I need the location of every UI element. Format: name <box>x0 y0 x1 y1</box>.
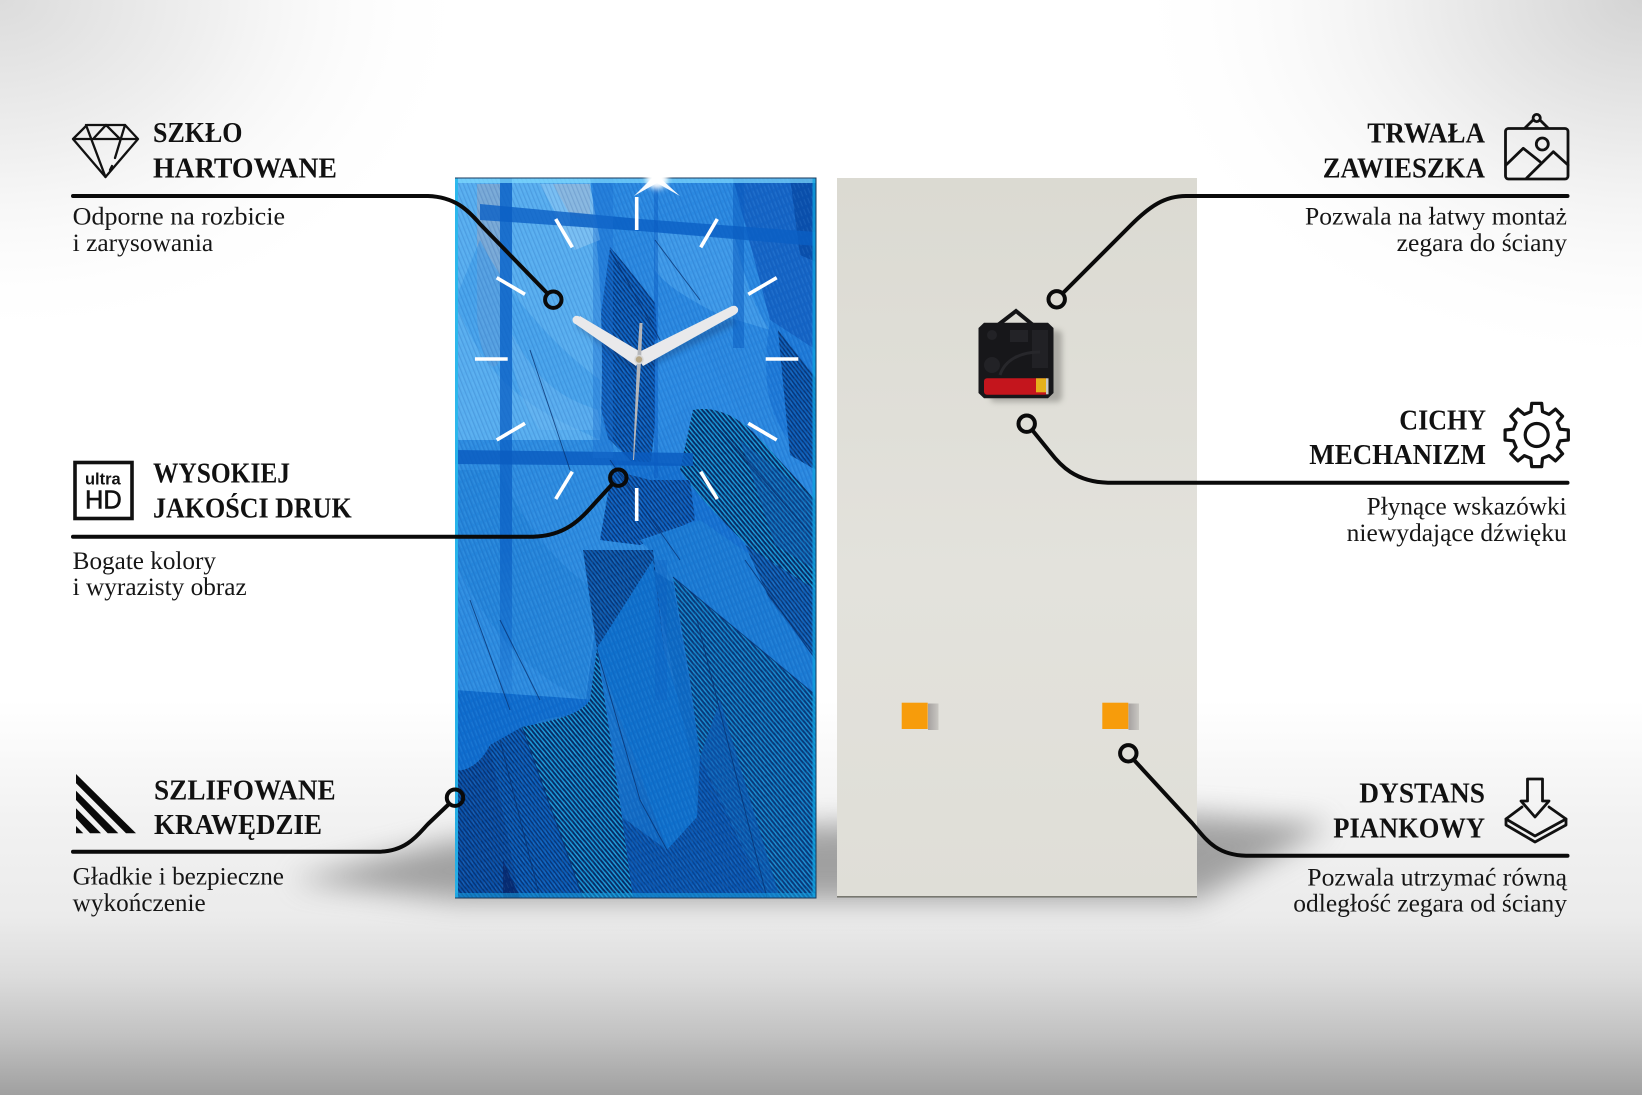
callout: silent mechanism <box>1018 403 1568 547</box>
callout: polished edges <box>73 774 463 917</box>
icon: ultra HD: ultra <box>85 470 121 488</box>
window reflection bars <box>455 178 816 708</box>
glint: light reflection at the top edge <box>634 167 680 196</box>
panel: clock back <box>837 178 1197 898</box>
description: i zarysowania <box>73 230 213 257</box>
callout: high quality print <box>73 457 626 601</box>
heading: HARTOWANE <box>153 152 337 184</box>
leader line and marker <box>73 470 626 537</box>
description: Gładkie i bezpieczne <box>73 863 284 890</box>
foam spacer right <box>1102 703 1139 730</box>
description: odległość zegara od ściany <box>1293 891 1568 918</box>
heading: JAKOŚCI DRUK <box>153 491 352 524</box>
icon: bevel stripes <box>76 774 136 833</box>
leader line and marker <box>73 790 463 852</box>
leader line and marker <box>1120 745 1568 856</box>
clock hour ticks <box>475 197 798 521</box>
description: niewydające dźwięku <box>1347 520 1567 547</box>
callout: tempered glass <box>73 117 561 308</box>
icon: picture hanger <box>1506 114 1568 179</box>
heading: PIANKOWY <box>1333 812 1485 844</box>
description: Pozwala na łatwy montaż <box>1305 203 1567 230</box>
heading: DYSTANS <box>1359 777 1485 809</box>
description: i wyrazisty obraz <box>73 574 247 601</box>
icon: gear <box>1505 403 1568 467</box>
leader line and marker <box>73 196 562 308</box>
foam spacer left <box>902 703 938 730</box>
callout: foam spacer <box>1120 745 1568 918</box>
description: wykończenie <box>73 890 206 917</box>
heading: SZLIFOWANE <box>154 774 336 806</box>
icon: ultra HD <box>75 462 132 518</box>
callout: durable hanger <box>1048 114 1568 307</box>
icon: ultra HD: HD <box>85 484 122 514</box>
heading: WYSOKIEJ <box>153 457 290 489</box>
heading: KRAWĘDZIE <box>154 809 322 841</box>
description: Bogate kolory <box>73 548 216 575</box>
description: Pozwala utrzymać równą <box>1307 865 1568 892</box>
heading: ZAWIESZKA <box>1323 152 1485 184</box>
leader line and marker <box>1018 416 1568 483</box>
description: zegara do ściany <box>1397 230 1568 257</box>
heading: SZKŁO <box>153 117 242 149</box>
mid feathers <box>455 409 816 713</box>
heading: TRWAŁA <box>1367 117 1485 149</box>
heading: MECHANIZM <box>1309 439 1486 471</box>
heading: CICHY <box>1399 404 1486 436</box>
clock hands <box>572 306 738 460</box>
clock mechanism <box>978 311 1062 402</box>
icon: diamond <box>73 125 138 177</box>
description: Płynące wskazówki <box>1367 493 1567 520</box>
upper centre and right feathers <box>590 178 816 496</box>
upper left light feathers <box>455 178 602 440</box>
description: Odporne na rozbicie <box>73 203 285 230</box>
panel: clock front with blue feathers <box>455 167 816 898</box>
lower feathers <box>455 520 816 898</box>
leader line and marker <box>1048 196 1568 307</box>
icon: arrow onto foam pad <box>1506 779 1566 842</box>
feather veins <box>470 240 816 898</box>
